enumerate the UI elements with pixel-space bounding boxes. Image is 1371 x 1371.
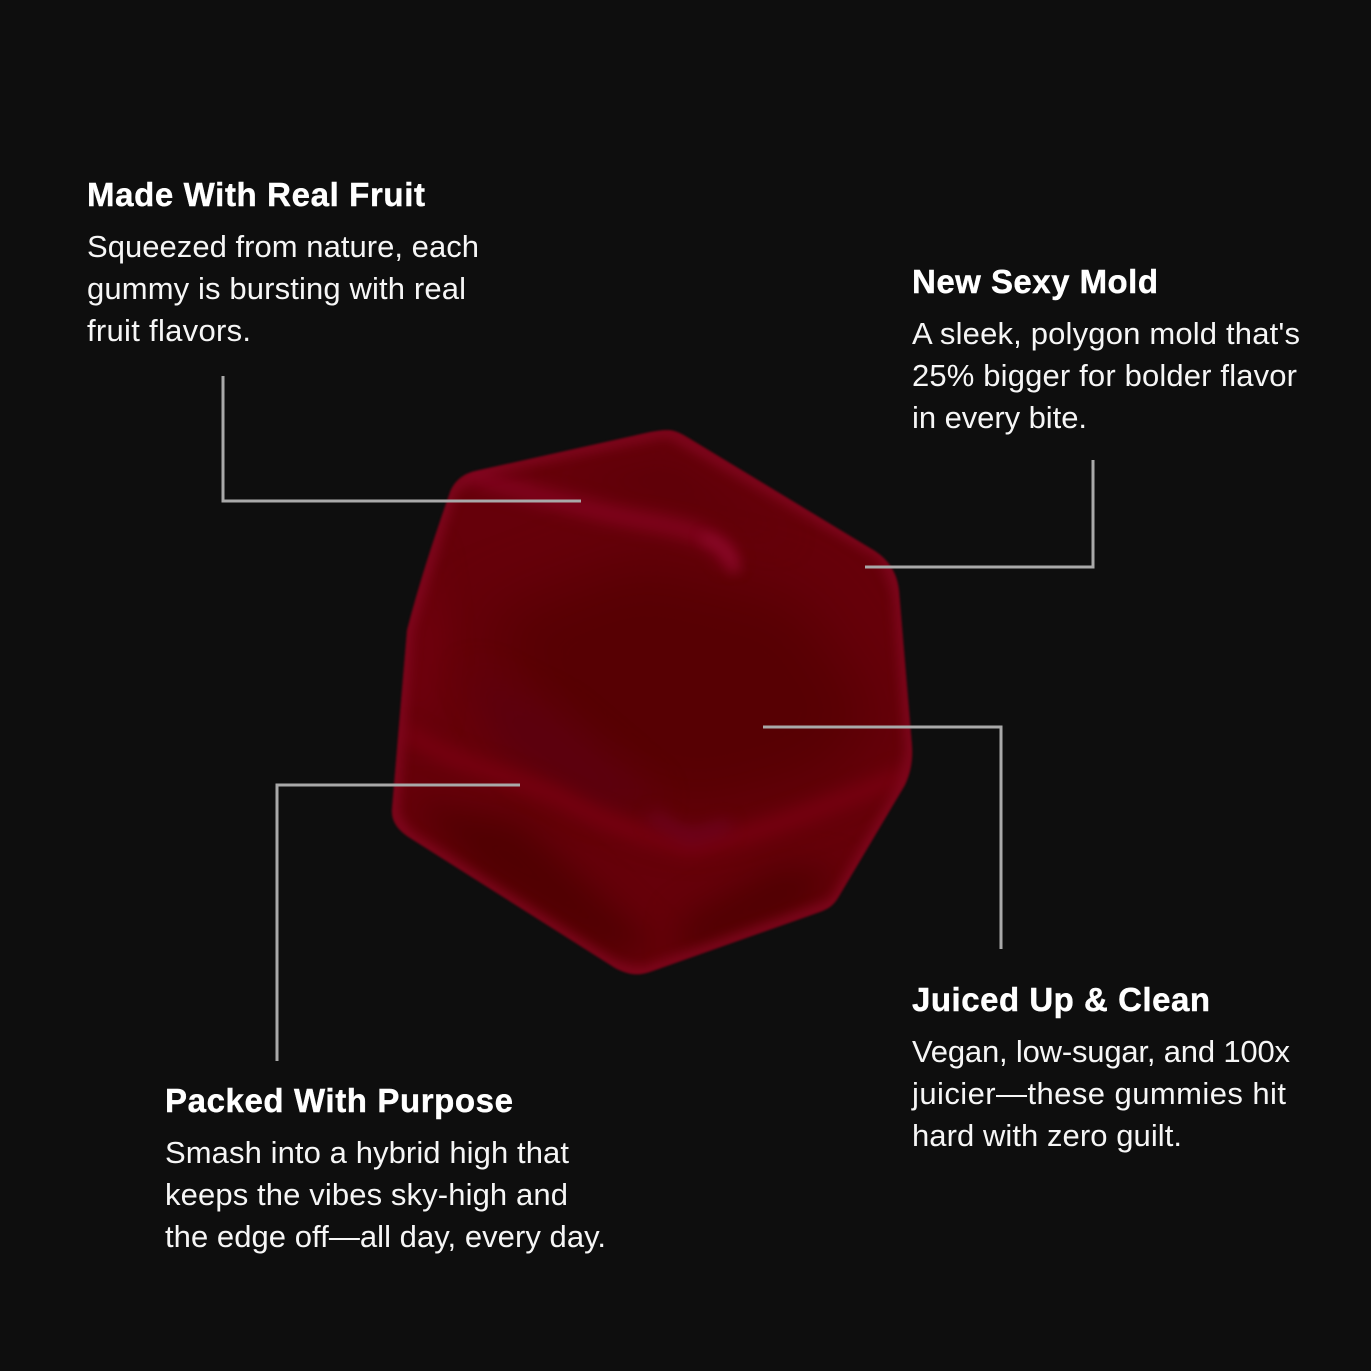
text: made with real fruit description: fruit flavors. bbox=[87, 313, 251, 348]
text: made with real fruit description: Squeezed from nature, each bbox=[87, 229, 479, 264]
text: juiced up and clean description bbox=[911, 1034, 1290, 1153]
gummy illustration bbox=[380, 420, 920, 980]
leader line: made with real fruit bbox=[223, 376, 581, 501]
heading: new sexy mold: New Sexy Mold bbox=[912, 263, 1158, 300]
text: made with real fruit description bbox=[87, 229, 479, 348]
text: packed with purpose description: the edge off—all day, every day. bbox=[165, 1219, 606, 1254]
callout: packed with purpose bbox=[165, 1082, 606, 1254]
callout: new sexy mold bbox=[912, 263, 1300, 435]
text: new sexy mold description: in every bite. bbox=[912, 400, 1087, 435]
heading: packed with purpose: Packed With Purpose bbox=[165, 1082, 513, 1119]
callout: made with real fruit bbox=[87, 176, 479, 348]
heading: juiced up and clean: Juiced Up & Clean bbox=[912, 981, 1210, 1018]
leader line: new sexy mold bbox=[865, 460, 1093, 567]
text: new sexy mold description bbox=[912, 316, 1300, 435]
text: new sexy mold description: A sleek, polygon mold that's bbox=[912, 316, 1300, 351]
callout: juiced up and clean bbox=[911, 981, 1290, 1153]
text: packed with purpose description: Smash into a hybrid high that bbox=[165, 1135, 569, 1170]
text: juiced up and clean description: hard with zero guilt. bbox=[912, 1118, 1182, 1153]
text: juiced up and clean description: juicier—these gummies hit bbox=[911, 1076, 1286, 1111]
text: juiced up and clean description: Vegan, low-sugar, and 100x bbox=[912, 1034, 1290, 1069]
leader line: juiced up and clean bbox=[763, 727, 1001, 949]
text: new sexy mold description: 25% bigger for bolder flavor bbox=[912, 358, 1297, 393]
text: packed with purpose description: keeps the vibes sky-high and bbox=[165, 1177, 568, 1212]
text: made with real fruit description: gummy is bursting with real bbox=[87, 271, 466, 306]
text: packed with purpose description bbox=[165, 1135, 606, 1254]
heading: made with real fruit: Made With Real Fruit bbox=[87, 176, 425, 213]
leader line: packed with purpose bbox=[277, 785, 520, 1061]
